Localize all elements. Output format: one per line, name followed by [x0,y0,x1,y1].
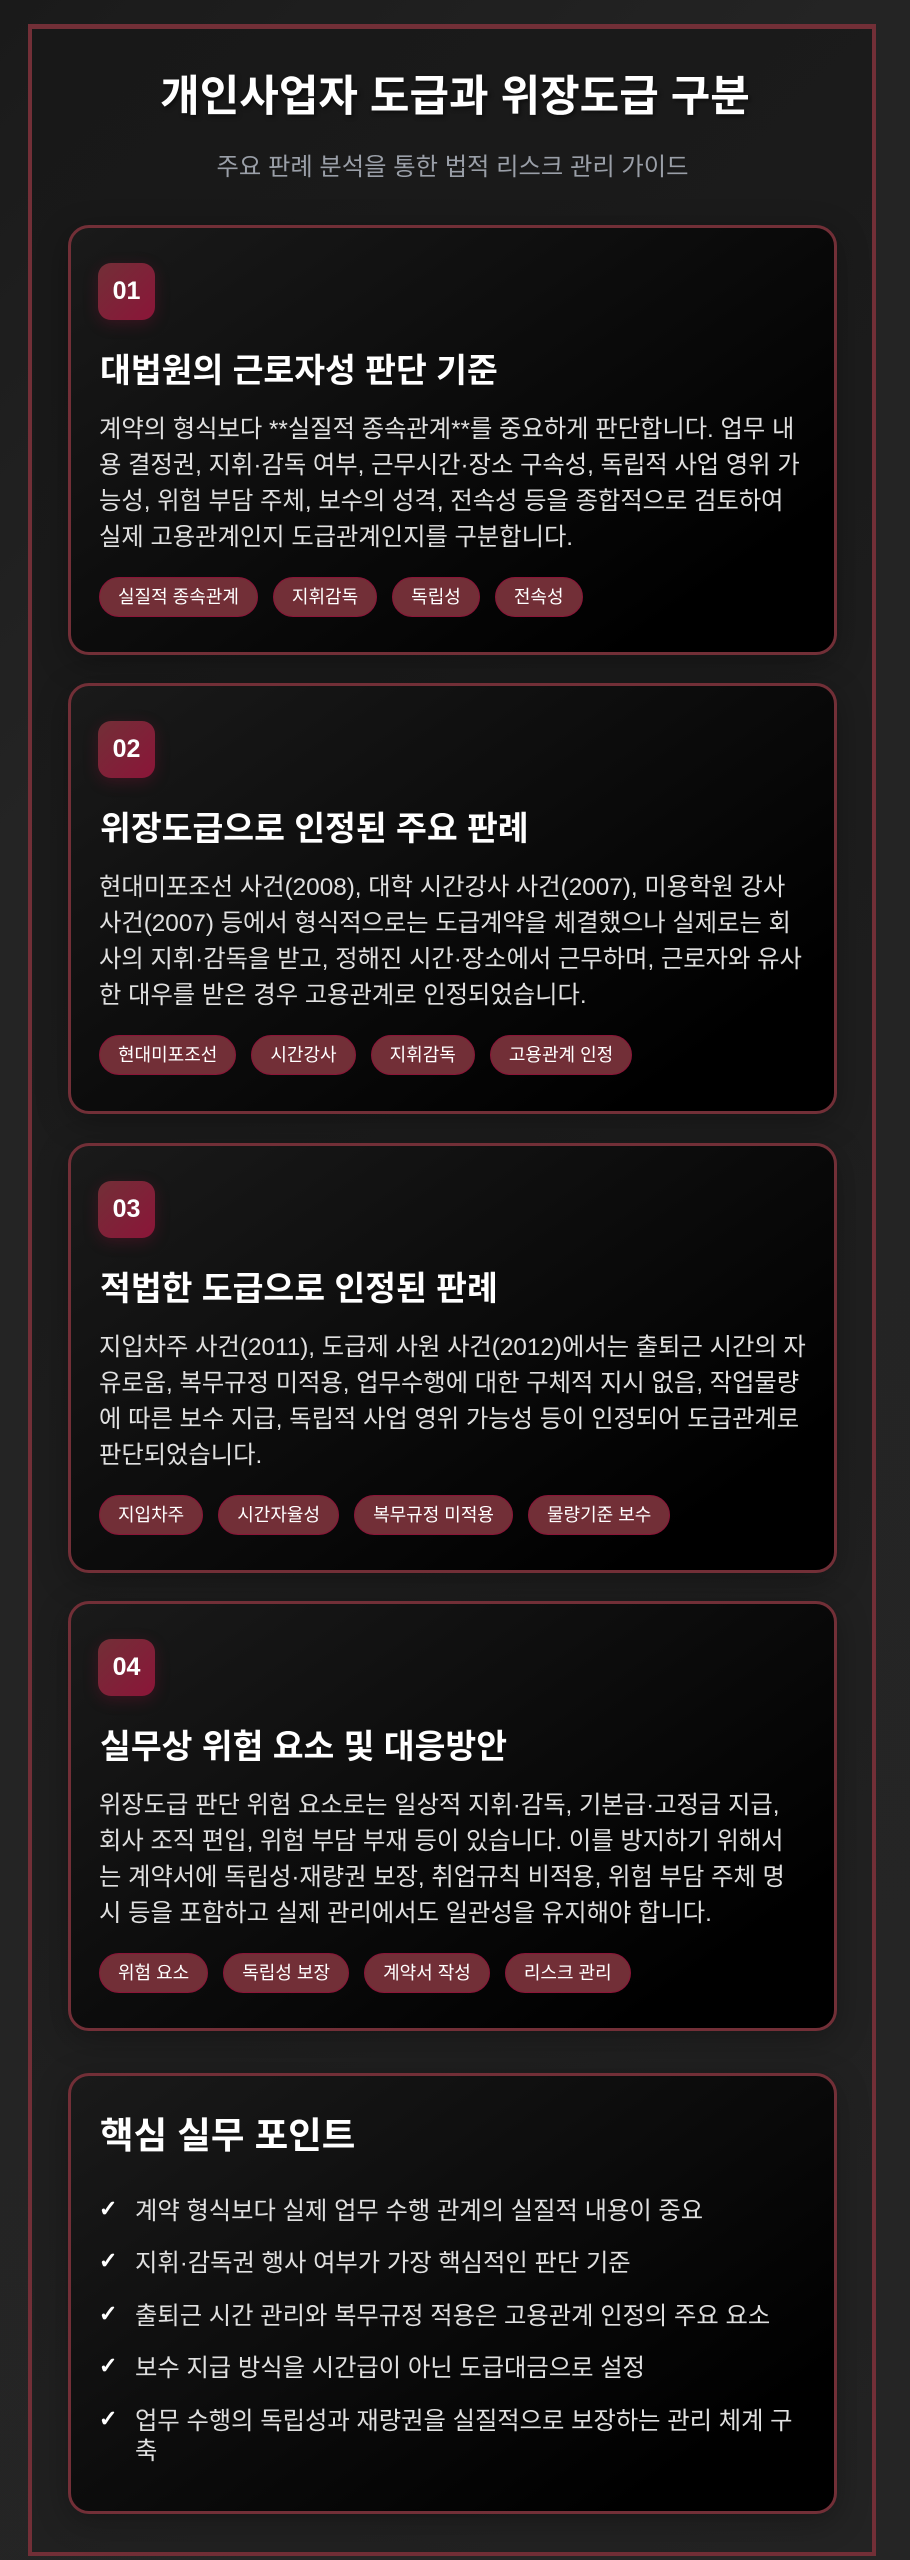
body text 03: 판단되었습니다. [99,1442,262,1468]
tags 03: 복무규정 미적용 [373,1505,494,1525]
panel: card 01 supreme court criteria [68,225,836,655]
list item 4: ✓ [99,2354,117,2379]
tags 01: 전속성 [514,587,564,607]
heading: key points: 핵심 실무 포인트 [100,2115,355,2156]
tags 04: 위험 요소 [118,1963,189,1983]
list item 1: ✓ [99,2197,117,2222]
body text 02: 현대미포조선 사건(2008), 대학 시간강사 사건(2007), 미용학원 강사 [99,874,785,900]
body text 01: 용 결정권, 지휘·감독 여부, 근무시간·장소 구속성, 독립적 사업 영위 가 [99,452,800,478]
badge 02: 02 [113,735,140,763]
panel: card 03 lawful contracting cases [68,1143,836,1573]
body text 02: 사의 지휘·감독을 받고, 정해진 시간·장소에서 근무하며, 근로자와 유사 [99,946,802,972]
tags 02: 시간강사 [270,1045,337,1065]
badge 03: 03 [113,1195,140,1223]
list item 5: 업무 수행의 독립성과 재량권을 실질적으로 보장하는 관리 체계 구 [135,2408,793,2435]
heading 04: 실무상 위험 요소 및 대응방안 [100,1728,507,1766]
badge 02 [98,721,155,778]
panel: card 04 practical risks [68,1601,836,2031]
body text 02: 사건(2007) 등에서 형식적으로는 도급계약을 체결했으나 실제로는 회 [99,910,791,936]
badge 04: 04 [113,1653,140,1681]
tags 01: 실질적 종속관계 [118,587,239,607]
tags 02 [99,1035,632,1075]
body text 03: 에 따른 보수 지급, 독립적 사업 영위 가능성 등이 인정되어 도급관계로 [99,1406,799,1432]
list item 5 [99,2407,793,2465]
body text 01: 실제 고용관계인지 도급관계인지를 구분합니다. [99,524,573,550]
body text 03: 지입차주 사건(2011), 도급제 사원 사건(2012)에서는 출퇴근 시간의 자 [99,1334,806,1360]
subtitle: 주요 판례 분석을 통한 법적 리스크 관리 가이드 [217,154,688,181]
tags 03: 지입차주 [118,1505,184,1525]
body text 04: 시 등을 포함하고 실제 관리에서도 일관성을 유지해야 합니다. [99,1900,712,1926]
body text 04: 회사 조직 편입, 위험 부담 부재 등이 있습니다. 이를 방지하기 위해서 [99,1828,784,1854]
tags 02: 현대미포조선 [118,1045,217,1065]
badge 04 [98,1639,155,1696]
heading 01: 대법원의 근로자성 판단 기준 [100,352,498,390]
tags 04: 독립성 보장 [242,1963,330,1983]
tags 04: 계약서 작성 [383,1963,471,1983]
list item 5: ✓ [99,2407,117,2432]
tags 04 [99,1953,631,1993]
tags 01 [99,577,583,617]
list item 5: 축 [135,2438,157,2465]
tags 01: 지휘감독 [292,587,358,607]
tags 02: 고용관계 인정 [509,1045,613,1065]
list item 3: ✓ [99,2302,117,2327]
badge 01: 01 [113,277,140,305]
tags 04: 리스크 관리 [524,1963,612,1983]
tags 01: 독립성 [411,587,461,607]
body text 04: 위장도급 판단 위험 요소로는 일상적 지휘·감독, 기본급·고정급 지급, [99,1792,779,1818]
body text 01 [99,416,800,550]
heading 03: 적법한 도급으로 인정된 판례 [100,1270,498,1308]
badge 03 [98,1181,155,1238]
panel: card 02 disguised contracting cases [68,683,836,1114]
body text 02 [99,874,802,1008]
body text 03 [99,1334,806,1468]
list item 4: 보수 지급 방식을 시간급이 아닌 도급대금으로 설정 [135,2355,645,2382]
tags 03 [99,1495,670,1535]
tags 03: 물량기준 보수 [547,1505,651,1525]
tags 03: 시간자율성 [237,1505,320,1525]
heading 02: 위장도급으로 인정된 주요 판례 [100,810,529,848]
list item 2: 지휘·감독권 행사 여부가 가장 핵심적인 판단 기준 [135,2250,631,2277]
panel: key practical points [68,2073,836,2514]
body text 04: 는 계약서에 독립성·재량권 보장, 취업규칙 비적용, 위험 부담 주체 명 [99,1864,785,1890]
body text 01: 계약의 형식보다 **실질적 종속관계**를 중요하게 판단합니다. 업무 내 [99,416,794,442]
body text 04 [99,1792,785,1926]
list item 2: ✓ [99,2249,117,2274]
body text 02: 한 대우를 받은 경우 고용관계로 인정되었습니다. [99,982,587,1008]
list item 3: 출퇴근 시간 관리와 복무규정 적용은 고용관계 인정의 주요 요소 [135,2303,770,2330]
body text 01: 능성, 위험 부담 주체, 보수의 성격, 전속성 등을 종합적으로 검토하여 [99,488,784,514]
list item 1: 계약 형식보다 실제 업무 수행 관계의 실질적 내용이 중요 [135,2198,703,2225]
title: 개인사업자 도급과 위장도급 구분 [160,73,750,121]
tags 02: 지휘감독 [390,1045,456,1065]
body text 03: 유로움, 복무규정 미적용, 업무수행에 대한 구체적 지시 없음, 작업물량 [99,1370,799,1396]
badge 01 [98,263,155,320]
